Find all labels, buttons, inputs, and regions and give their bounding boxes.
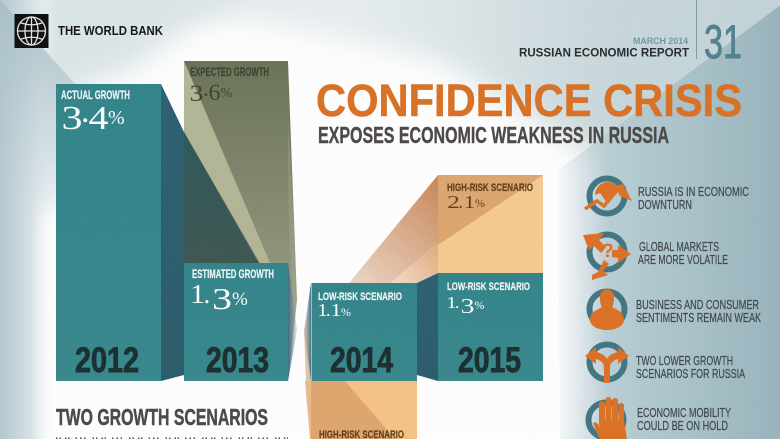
icon: economic downturn [585,178,632,214]
text: hand on hold: COULD BE ON HOLD [637,418,728,433]
value: 1 [446,293,456,312]
value: 1 [464,192,475,212]
value: 3 [62,100,82,137]
value: . [203,76,209,102]
value: 2 [447,192,460,212]
year: 2015 [458,341,521,380]
value: . [455,293,459,312]
organisation name: THE WORLD BANK [58,23,164,38]
text: economic downturn: DOWNTURN [638,197,692,212]
value: . [326,300,330,320]
value: 3 [460,294,474,318]
label: ACTUAL GROWTH [61,90,130,102]
icon: volatile markets: ? [602,241,614,262]
value: % [475,196,485,210]
value: % [474,298,484,312]
text: volatile markets [638,239,728,267]
heading: two growth scenarios: TWO GROWTH SCENARIOS [56,404,268,430]
value [62,93,125,137]
label: LOW-RISK SCENARIO [447,281,530,293]
report number: 31 [704,15,742,68]
chart: 2014 high-risk scenario [304,300,417,439]
value: 3 [212,281,232,316]
year: 2014 [330,341,393,380]
text: two scenarios: TWO LOWER GROWTH [636,353,733,368]
label: LOW-RISK SCENARIO [318,291,402,303]
value [190,76,232,107]
chart: 2012 actual growth [56,84,184,381]
chart: 2013 estimated growth [184,263,297,381]
year: 2013 [206,341,269,380]
value: 1 [318,300,328,320]
label: HIGH-RISK SCENARIO [447,182,533,194]
text: two scenarios [636,353,745,381]
year: 2012 [75,341,139,380]
value: 3 [190,81,204,107]
icon: weak sentiment [590,289,624,330]
chart: 2015 low-risk scenario [438,273,543,381]
text: hand on hold [637,405,731,433]
icon: hand on hold [588,397,627,439]
value [190,279,248,316]
label: ESTIMATED GROWTH [192,269,274,281]
chart: expected growth 2013 [184,61,297,381]
value [447,192,485,212]
value: % [232,289,248,310]
text: hand on hold: ECONOMIC MOBILITY [637,405,731,420]
value: 1 [330,300,342,320]
value: % [108,107,125,129]
value: % [341,305,351,319]
logo: The World Bank [14,14,48,48]
report date: MARCH 2014 [633,36,688,46]
value: 1 [190,279,205,309]
icon: volatile markets [583,233,631,280]
value: 4 [88,100,108,137]
chart: 2014 low-risk scenario [304,273,438,381]
text: volatile markets: GLOBAL MARKETS [639,239,719,254]
value: . [458,192,463,212]
value [318,300,351,320]
report name: RUSSIAN ECONOMIC REPORT [519,46,690,60]
icon: two scenarios [585,344,629,383]
illegible body text line cropped by the page edge, shown as letter-top marks [56,437,288,439]
text: economic downturn [638,184,749,212]
value: % [220,86,232,101]
title: CONFIDENCE CRISIS [316,75,742,126]
value [446,293,484,318]
label: EXPECTED GROWTH [190,67,269,79]
value: 6 [208,80,221,106]
text: volatile markets: ARE MORE VOLATILE [638,252,728,267]
value: . [204,279,210,309]
text: weak sentiment [636,297,761,325]
value: . [81,93,90,130]
icon: globe [18,17,46,45]
chart: 2015 high-risk scenario [349,175,543,283]
